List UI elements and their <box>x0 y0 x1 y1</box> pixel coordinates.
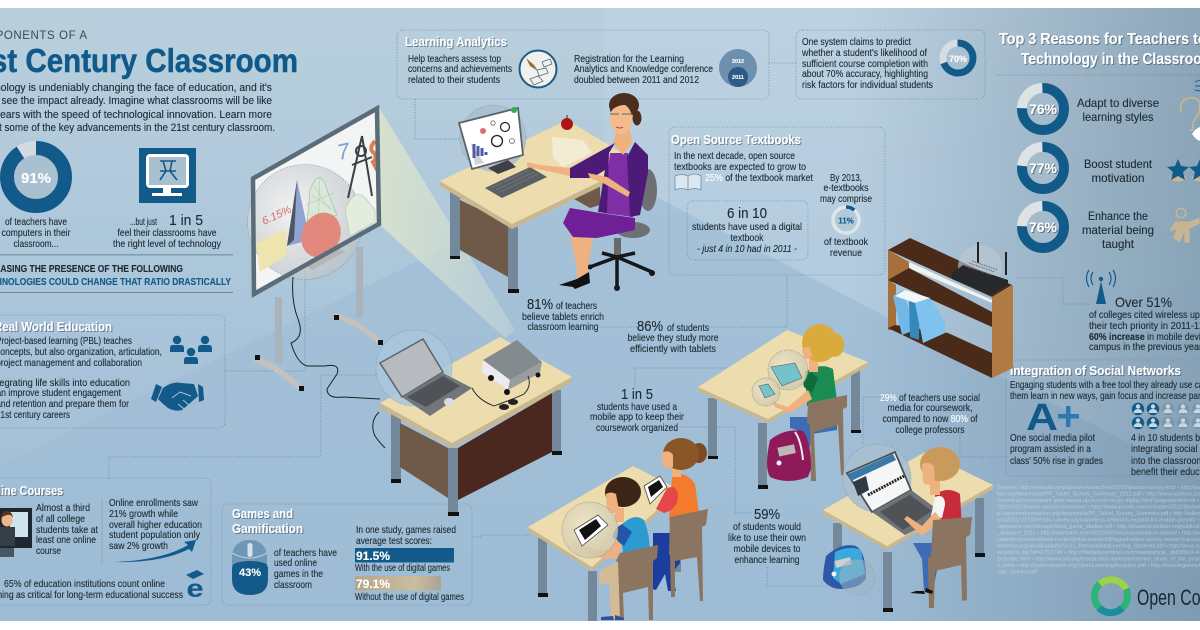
panel: 70% predictive system: whether a student's likelihood of <box>801 48 927 59</box>
stat: 91% of teachers have computers: 91% <box>21 170 51 187</box>
panel: open source textbooks: In the next decade, open source <box>674 151 795 162</box>
illustration: student with laptop <box>823 444 993 612</box>
apple <box>561 115 573 130</box>
icon: monitor with desk <box>139 148 196 203</box>
panel: online courses: of all college <box>36 514 85 525</box>
icon: mouse 43% <box>232 540 268 595</box>
stat: 81% of teachers: of teachers <box>556 301 597 312</box>
panel: games and gamification: average test scores: <box>356 536 432 547</box>
icon: video lecturer <box>0 508 32 557</box>
donut: 11% <box>833 207 859 233</box>
panel: integration of social networks <box>1006 360 1200 478</box>
panel: open source textbooks: of textbook <box>824 237 869 248</box>
donut: 70% <box>943 43 973 73</box>
panel: open source textbooks: textbooks are expected to grow to <box>674 162 806 173</box>
reason: enhance the material <box>1022 206 1200 251</box>
icon: stars <box>1167 159 1200 182</box>
stat: 1 in 5: ...but just <box>130 217 157 228</box>
stat: wireless over 51%: Over 51% <box>1115 294 1172 310</box>
panel: real world education: project management and collaboration <box>0 358 142 369</box>
panel: online courses: student population only <box>109 530 201 541</box>
stat: 59% of students: of students would <box>733 522 801 533</box>
panel: learning analytics: Help teachers assess top <box>408 54 501 65</box>
girl chair <box>669 509 708 601</box>
stat: 1 in 5 <box>113 212 222 250</box>
panel: open source textbooks: may comprise <box>820 194 872 205</box>
donut: 70%: 70% <box>949 54 967 64</box>
stat: 91% of teachers have computers: classroom... <box>14 239 58 250</box>
icon: A+ grade: A <box>1026 397 1058 439</box>
logo: open colleges <box>1094 580 1200 613</box>
stat: 59% of students: enhance learning <box>734 555 800 566</box>
panel: 70% predictive system: sufficient course completion with <box>802 59 928 70</box>
panel: learning analytics: Learning Analytics <box>405 34 507 49</box>
panel: online courses: overall higher education <box>109 520 202 531</box>
icon: mouse 43%: 43% <box>239 567 261 579</box>
illustration: interactive whiteboard <box>248 108 383 391</box>
connector lines <box>109 63 1090 586</box>
stat: 59% of students: 59% <box>754 506 780 523</box>
reason: adapt to diverse learning styles <box>1022 80 1200 141</box>
laptop <box>843 444 911 512</box>
stat: 86% of students <box>628 318 719 355</box>
illustration: interactive whiteboard: 7 <box>335 138 353 165</box>
stat: 1 in 5 students: 1 in 5 <box>621 386 653 403</box>
panel: real world education: Project-based learning (PBL) teaches <box>0 336 132 347</box>
icon: people <box>170 336 212 364</box>
stat: 86% of students: efficiently with tablets <box>630 344 716 355</box>
illustration: center desk with laptop and projector <box>376 330 572 516</box>
panel: open source textbooks <box>669 127 885 275</box>
icon: 2012 2011 circles: 2011 <box>732 75 744 81</box>
panel: open source textbooks: Open Source Textbooks <box>671 132 801 147</box>
tablet bubble <box>768 350 808 390</box>
panel: integration of social networks: Integration of Social Networks <box>1010 363 1181 378</box>
backpack <box>767 430 811 481</box>
stat: 81% of teachers: 81% <box>527 296 553 313</box>
boy <box>599 560 633 620</box>
computer <box>460 105 526 171</box>
stat: 81% of teachers: classroom learning <box>528 322 599 333</box>
icon: clipboard <box>520 50 556 88</box>
keyboard <box>485 167 547 198</box>
forearms <box>527 162 570 176</box>
panel: online courses: Online enrollments saw <box>109 498 199 509</box>
reason: adapt to diverse learning styles: 76% <box>1029 101 1058 117</box>
stat: 1 in 5 students: students have used a <box>597 402 677 413</box>
stat: 81% of teachers: believe tablets enrich <box>522 312 604 323</box>
neck and chest <box>613 130 632 155</box>
sources text <box>996 485 1200 576</box>
panel: learning analytics: Registration for the Learning <box>574 54 684 65</box>
panel: learning analytics: Analytics and Knowledge conference <box>574 64 713 75</box>
donut: 11%: 11% <box>838 216 854 226</box>
icon: e-learning cap: e <box>186 575 204 603</box>
stat: 29% of teachers use social media: college professors <box>896 424 964 436</box>
panel: open source textbooks: 6 in 10 <box>727 205 767 222</box>
illustration: blond student at desk <box>698 324 868 489</box>
icon: people grid <box>1132 403 1200 429</box>
papers <box>552 137 592 167</box>
stat: 1 in 5 students: coursework organized <box>596 423 678 434</box>
projector light beam <box>378 106 515 338</box>
icon: e-learning cap <box>186 570 204 603</box>
stat: 29% of teachers use social media: media for coursework, <box>888 402 972 414</box>
panel: 70% predictive system: about 70% accuracy, highlighting <box>802 69 928 80</box>
icon: wireless tower <box>1086 270 1116 304</box>
panel: real world education <box>0 315 225 428</box>
panel: online courses: Almost a third <box>36 503 90 514</box>
chair <box>928 517 972 608</box>
icon: ear and eye <box>1181 80 1200 141</box>
stat: 29% of teachers use social media <box>880 392 980 436</box>
illustration: shelf with books and router <box>888 238 1013 378</box>
boy <box>913 543 962 591</box>
panel: games and gamification: used online <box>274 558 317 569</box>
dress <box>603 153 633 217</box>
intro text <box>0 82 275 134</box>
panel: learning analytics: concerns and achievements <box>408 64 512 75</box>
reason: enhance the material: Enhance the <box>1088 209 1148 223</box>
reason: enhance the material: material being <box>1082 223 1154 237</box>
panel: open source textbooks: students have used a digital <box>692 222 802 233</box>
stat: 86% of students: 86% <box>637 318 663 335</box>
panel: games and gamification: Games and <box>232 506 293 521</box>
stat: 1 in 5 students: mobile app to keep their <box>590 412 685 423</box>
reason: adapt to diverse learning styles: learning styles <box>1082 110 1154 124</box>
icon: 2012 2011 circles <box>719 49 757 87</box>
panel: real world education: and retention and prepare them for <box>0 399 130 410</box>
panel: online courses: least one online <box>36 535 96 546</box>
panel: open source textbooks: revenue <box>830 248 862 259</box>
icon: 2012 2011 circles: 2012 <box>732 59 744 65</box>
panel: online courses: students take at <box>36 525 98 536</box>
panel: 70% predictive system: One system claims to predict <box>802 37 911 48</box>
panel: games and gamification: classroom <box>274 580 312 591</box>
girl <box>648 533 680 591</box>
illustration: two students with tablets <box>528 438 708 621</box>
chair <box>639 169 657 211</box>
reason: boost student motivation: motivation <box>1092 171 1144 185</box>
icon: open book <box>675 174 701 190</box>
stat: 91% of teachers have computers <box>2 148 71 250</box>
panel: online courses: saw 2% growth <box>109 541 168 552</box>
stat: 86% of students: of students <box>667 323 709 334</box>
head <box>809 358 818 372</box>
stat: 1 in 5: the right level of technology <box>113 239 222 250</box>
icon: handshake <box>151 383 204 411</box>
panel: games and gamification <box>222 504 472 605</box>
panel: open source textbooks: 25% of the textbook market <box>705 173 813 184</box>
blue backpack <box>823 545 866 589</box>
stat: 1 in 5 students <box>590 386 685 434</box>
reason: boost student motivation <box>1022 147 1200 189</box>
panel: learning analytics <box>397 30 769 99</box>
stat: 91% of teachers have computers: of teachers have <box>5 217 67 228</box>
stat: 59% of students <box>728 506 806 566</box>
stat: 86% of students: believe they study more <box>628 333 719 344</box>
panel: open source textbooks: By 2013, <box>830 173 862 184</box>
panel: online courses: 21% growth while <box>109 509 178 520</box>
sources text: note_Siemens.pdf <box>997 570 1037 576</box>
bar: 79.1% <box>355 576 441 591</box>
stat: 91% of teachers have computers: computers in their <box>2 228 71 239</box>
panel: games and gamification: With the use of digital games <box>355 563 450 574</box>
bar: 91.5% <box>355 548 454 563</box>
panel: learning analytics: related to their students <box>408 75 500 86</box>
stat: wireless over 51% <box>1086 270 1200 353</box>
panel: games and gamification: Gamification <box>232 521 303 536</box>
girl device <box>644 476 667 504</box>
illustration: teacher <box>527 93 657 291</box>
subheading: increasing the presence <box>0 254 233 293</box>
panel: games and gamification: games in the <box>274 569 323 580</box>
icon: presenter <box>1168 208 1200 243</box>
icon: A+ grade <box>1026 397 1079 439</box>
reason: boost student motivation: Boost student <box>1084 157 1153 171</box>
panel: learning analytics: doubled between 2011 and 2012 <box>574 75 699 86</box>
panel: integration of social networks: class' 50% rise in grades <box>1010 456 1103 467</box>
stat: 81% of teachers <box>522 296 604 333</box>
head <box>632 110 642 126</box>
illustration: cables <box>291 277 385 448</box>
panel: open source textbooks: textbook <box>730 233 764 244</box>
cardigan <box>570 143 615 213</box>
panel: games and gamification: of teachers have <box>274 548 337 559</box>
jeans <box>790 417 837 462</box>
panel: integration of social networks: program assisted in a <box>1010 444 1091 455</box>
legs <box>570 236 593 283</box>
stat: 59% of students: like to use their own <box>728 533 806 544</box>
reason: enhance the material: taught <box>1102 237 1135 251</box>
skirt <box>563 208 635 238</box>
heading: top 3 reasons <box>996 31 1200 75</box>
panel: real world education: concepts, but also organization, articulation, <box>0 347 162 358</box>
reason: boost student motivation: 77% <box>1029 160 1058 176</box>
panel: online courses: course <box>36 546 61 557</box>
stat: 1 in 5: 1 in 5 <box>169 212 203 229</box>
bar: 79.1%: 79.1% <box>356 577 390 591</box>
panel: 70% predictive system <box>796 30 985 99</box>
title <box>0 30 298 79</box>
stat: 29% of teachers use social media: 29% of teachers use social <box>880 392 980 404</box>
stat: 59% of students: mobile devices to <box>734 544 801 555</box>
bar: 91.5%: 91.5% <box>356 549 390 563</box>
panel: integration of social networks: One social media pilot <box>1010 433 1095 444</box>
green shirt <box>805 366 837 406</box>
panel: open source textbooks: - just 4 in 10 had in 2011 - <box>697 244 798 255</box>
panel: games and gamification: Without the use of digital games <box>355 592 464 603</box>
arrow: growth <box>115 540 196 562</box>
reason: adapt to diverse learning styles: Adapt to diverse <box>1077 96 1159 110</box>
stat: 29% of teachers use social media: compared to now 80% of <box>882 413 978 425</box>
chair <box>807 395 847 481</box>
reason: enhance the material: 76% <box>1029 219 1058 235</box>
panel: 70% predictive system: risk factors for individual students <box>802 80 933 91</box>
router <box>958 245 1002 289</box>
panel: open source textbooks: e-textbooks <box>824 183 868 194</box>
panel: online courses: 65% of education institutions count online <box>4 579 165 590</box>
panel: games and gamification: In one study, games raised <box>356 525 456 536</box>
stat: 1 in 5: feel their classrooms have <box>118 228 217 239</box>
illustration: teacher desk <box>440 105 639 293</box>
panel: online courses <box>0 478 211 605</box>
illustration: interactive whiteboard: 6.15% <box>260 204 294 228</box>
